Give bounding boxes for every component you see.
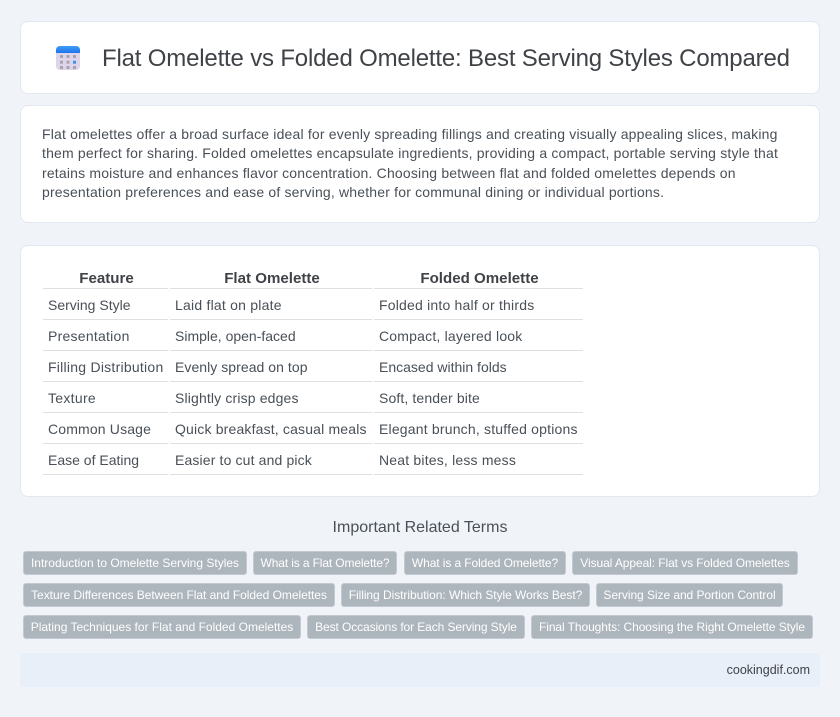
intro text panel xyxy=(20,105,820,223)
intro paragraph: Flat omelettes offer a broad surface ideal for evenly spreading fillings and creating visually appealing slices, making xyxy=(42,126,778,142)
table rows: Texture xyxy=(48,390,96,406)
intro paragraph: them perfect for sharing. Folded omelettes encapsulate ingredients, providing a compact, portable serving style that xyxy=(42,145,778,161)
related terms tags: What is a Flat Omelette? xyxy=(261,556,389,570)
table rows: Presentation xyxy=(48,328,130,344)
comparison table panel xyxy=(20,245,820,497)
footer source: cookingdif.com xyxy=(727,663,810,677)
table rows: Easier to cut and pick xyxy=(175,452,312,468)
table rows: Folded into half or thirds xyxy=(379,297,534,313)
table header: Folded Omelette xyxy=(420,270,539,287)
table rows: Common Usage xyxy=(48,421,151,437)
related terms tags: Serving Size and Portion Control xyxy=(603,588,776,602)
related terms tags: Best Occasions for Each Serving Style xyxy=(315,620,517,634)
icon: calendar xyxy=(56,46,80,70)
table rows: Ease of Eating xyxy=(48,452,139,468)
table rows: Compact, layered look xyxy=(379,328,522,344)
table rows: Evenly spread on top xyxy=(175,359,308,375)
table rows: Quick breakfast, casual meals xyxy=(175,421,367,437)
related terms heading: Important Related Terms xyxy=(333,519,507,536)
related terms tags: Plating Techniques for Flat and Folded Omelettes xyxy=(31,620,293,634)
table header: Feature xyxy=(79,270,134,287)
table header xyxy=(79,270,539,287)
table rows: Filling Distribution xyxy=(48,359,163,375)
table header: Flat Omelette xyxy=(224,270,320,287)
related terms tags: Visual Appeal: Flat vs Folded Omelettes xyxy=(580,556,790,570)
related terms tags xyxy=(23,551,813,639)
related terms tags: Final Thoughts: Choosing the Right Omelette Style xyxy=(539,620,805,634)
table rows xyxy=(43,288,583,475)
table rows: Neat bites, less mess xyxy=(379,452,516,468)
table rows: Simple, open-faced xyxy=(175,328,296,344)
related terms tags: Filling Distribution: Which Style Works Best? xyxy=(349,588,582,602)
related terms tags: What is a Folded Omelette? xyxy=(412,556,558,570)
intro paragraph: presentation preferences and ease of serving, whether for communal dining or individual portions. xyxy=(42,184,664,200)
intro paragraph xyxy=(42,126,778,200)
table rows: Encased within folds xyxy=(379,359,507,375)
table rows: Serving Style xyxy=(48,297,130,313)
table rows: Elegant brunch, stuffed options xyxy=(379,421,578,437)
related terms tags: Introduction to Omelette Serving Styles xyxy=(31,556,239,570)
related terms tags: Texture Differences Between Flat and Folded Omelettes xyxy=(31,588,327,602)
footer bar xyxy=(20,653,820,687)
table rows: Slightly crisp edges xyxy=(175,390,299,406)
intro paragraph: retains moisture and enhances flavor concentration. Choosing between flat and folded omelettes depends on xyxy=(42,165,736,181)
title: Flat Omelette vs Folded Omelette: Best Serving Styles Compared xyxy=(102,45,790,72)
header panel xyxy=(20,21,820,94)
table rows: Laid flat on plate xyxy=(175,297,282,313)
table rows: Soft, tender bite xyxy=(379,390,480,406)
